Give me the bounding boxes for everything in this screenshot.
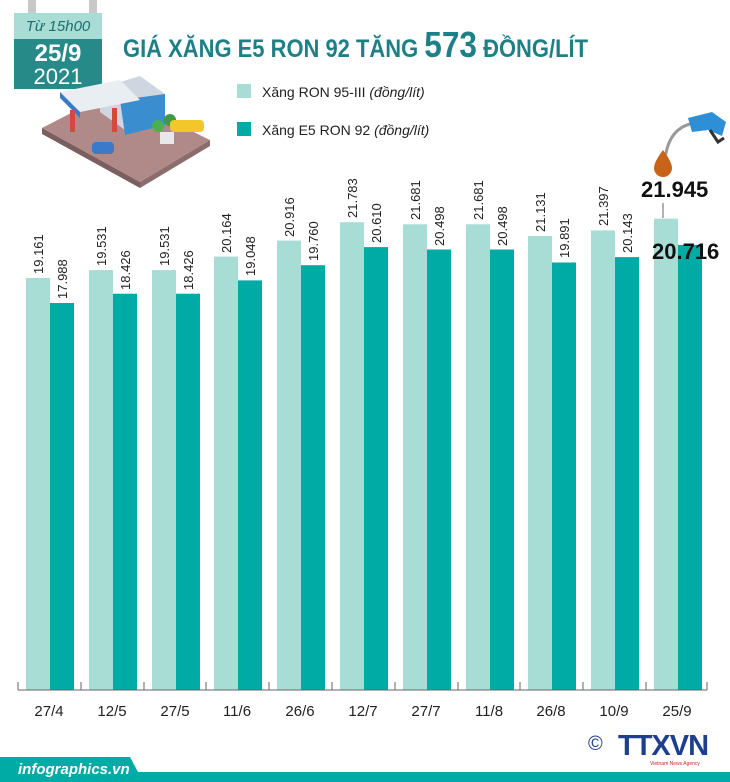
date labels: 26/8 xyxy=(536,703,566,720)
highlighted last values: 20.716 xyxy=(652,239,719,264)
value labels: 17.988 xyxy=(55,259,70,299)
calendar badge xyxy=(14,0,102,89)
title: GIÁ XĂNG E5 RON 92 TĂNG 573 ĐỒNG/LÍT xyxy=(123,24,588,65)
value labels: 19.161 xyxy=(31,234,46,274)
value labels: 20.498 xyxy=(495,206,510,246)
value labels: 21.681 xyxy=(408,180,423,220)
illustration: petrol station xyxy=(42,76,210,188)
value labels: 18.426 xyxy=(181,250,196,290)
date labels: 27/7 xyxy=(411,703,441,720)
date labels xyxy=(34,703,692,720)
calendar badge: Từ 15h00 xyxy=(26,18,91,35)
icon: fuel nozzle and drop xyxy=(654,112,726,177)
highlighted last values: 21.945 xyxy=(641,177,708,202)
legend: Xăng RON 95-III (đồng/lít) xyxy=(262,84,425,100)
logo: TTXVN: © xyxy=(588,733,603,755)
logo: TTXVN: TTXVN xyxy=(618,730,708,762)
value labels: 19.048 xyxy=(243,236,258,276)
calendar badge: 25/9 xyxy=(35,40,81,67)
date labels: 26/6 xyxy=(285,703,315,720)
value labels: 20.164 xyxy=(219,213,234,253)
value labels: 19.531 xyxy=(157,226,172,266)
date labels: 25/9 xyxy=(662,703,692,720)
value labels: 21.131 xyxy=(533,192,548,232)
date labels: 12/5 xyxy=(97,703,127,720)
value labels: 18.426 xyxy=(118,250,133,290)
value labels: 19.531 xyxy=(94,226,109,266)
highlighted last values xyxy=(641,177,719,264)
date labels: 10/9 xyxy=(599,703,629,720)
legend: Xăng E5 RON 92 (đồng/lít) xyxy=(262,122,429,138)
value labels: 20.610 xyxy=(369,203,384,243)
date labels: 12/7 xyxy=(348,703,378,720)
value labels: 19.891 xyxy=(557,218,572,258)
value labels: 20.916 xyxy=(282,197,297,237)
value labels: 19.760 xyxy=(306,221,321,261)
axis xyxy=(18,682,707,690)
date labels: 11/6 xyxy=(223,703,251,720)
footer xyxy=(0,757,730,782)
legend xyxy=(237,84,429,138)
footer: infographics.vn xyxy=(18,761,130,778)
date labels: 11/8 xyxy=(475,703,503,720)
logo: TTXVN xyxy=(588,730,708,767)
bar chart xyxy=(18,177,719,720)
value labels xyxy=(31,178,635,299)
value labels: 21.397 xyxy=(596,186,611,226)
date labels: 27/4 xyxy=(34,703,64,720)
value labels: 20.498 xyxy=(432,206,447,246)
calendar badge: 2021 xyxy=(34,64,82,89)
date labels: 27/5 xyxy=(160,703,190,720)
value labels: 21.681 xyxy=(471,180,486,220)
logo: TTXVN: Vietnam News Agency xyxy=(650,761,700,767)
value labels: 20.143 xyxy=(620,213,635,253)
value labels: 21.783 xyxy=(345,178,360,218)
